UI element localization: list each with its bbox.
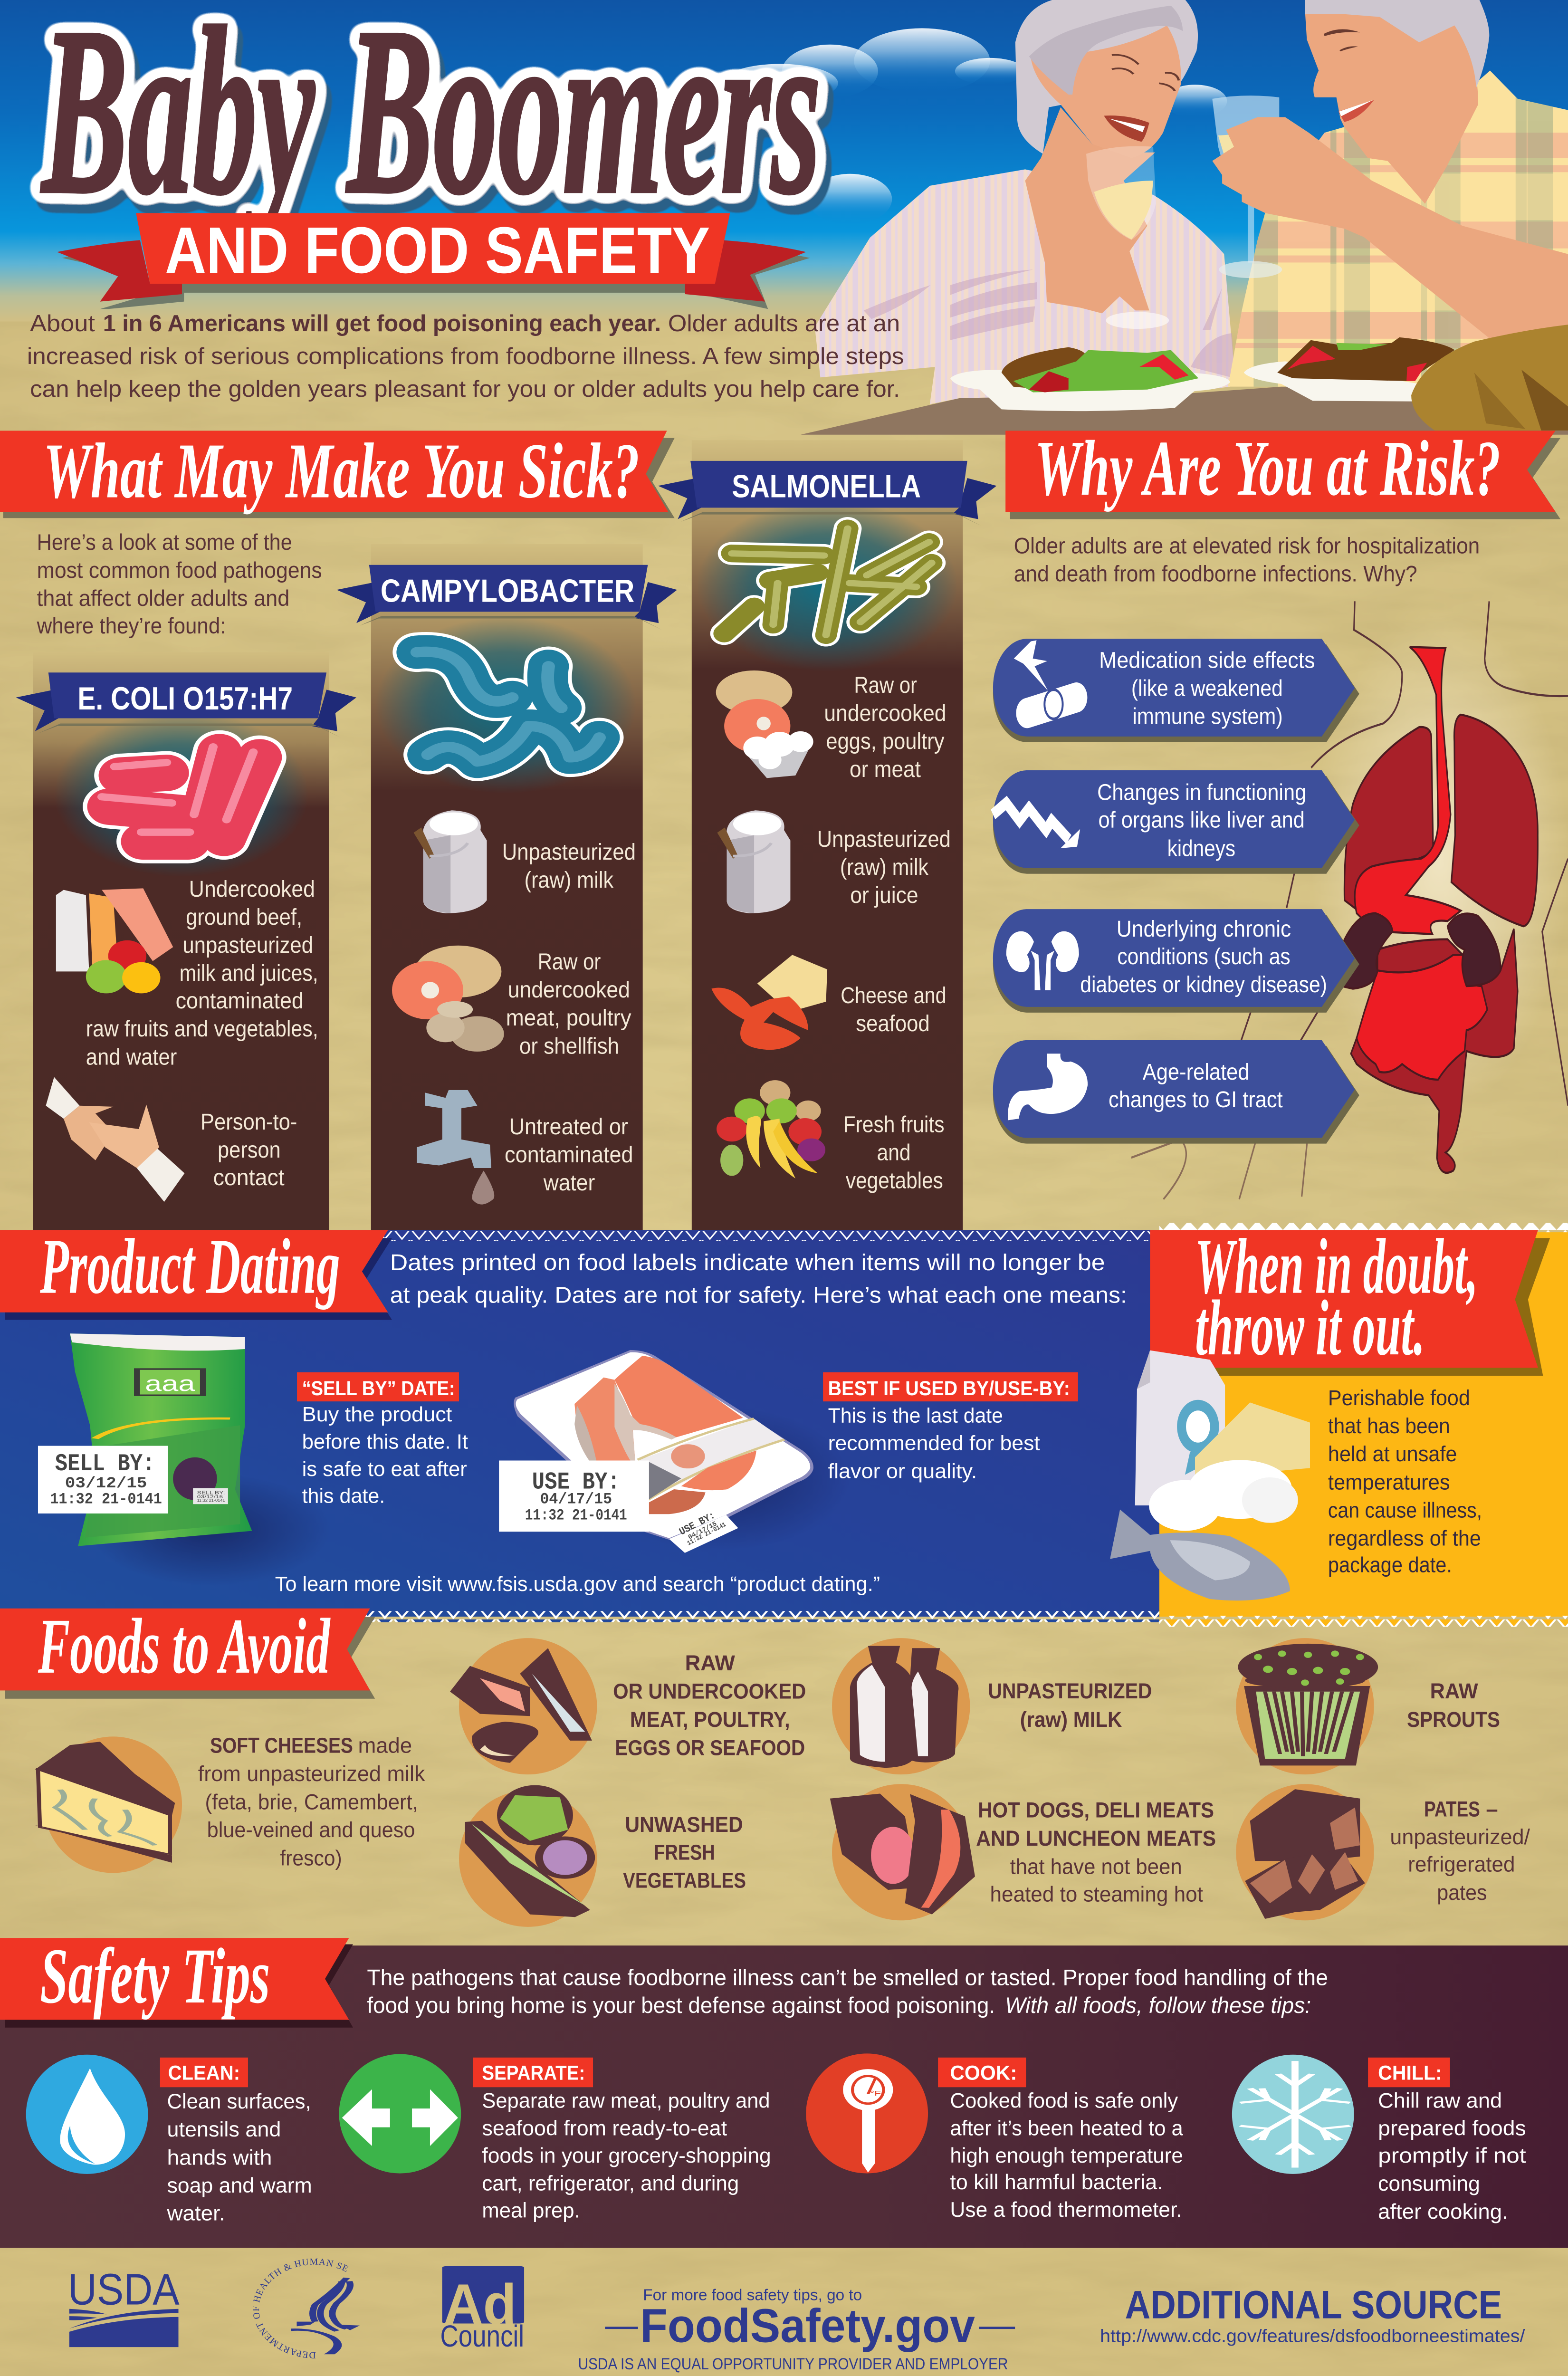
icon: carton, cheese, eggs and fish xyxy=(1110,1351,1310,1600)
icon: salad bag: aaa xyxy=(145,1372,195,1396)
panel: product dating: Buy the product xyxy=(302,1403,452,1426)
panel: product dating xyxy=(0,1230,1159,1622)
tip: clean: water. xyxy=(167,2201,225,2225)
tag: sell by xyxy=(38,1446,168,1514)
icon: milk can xyxy=(717,810,790,913)
text: person to person xyxy=(201,1109,297,1190)
ribbon: Campylobacter xyxy=(336,565,677,630)
icon: milk can xyxy=(414,810,487,913)
panel: foods to avoid: FRESH xyxy=(654,1840,715,1865)
icon: salad bag xyxy=(70,1333,252,1546)
ribbon: E. coli xyxy=(16,672,356,738)
text: unpasteurized milk xyxy=(502,839,636,893)
icon: E. coli bacteria xyxy=(102,747,259,842)
icon: soft cheese xyxy=(35,1736,182,1873)
icon: lightning and capsule xyxy=(1014,640,1076,719)
panel: foods to avoid: blue-veined and queso xyxy=(207,1818,415,1842)
text: E. coli sources: contaminated xyxy=(176,988,304,1014)
text: sell by description xyxy=(302,1403,468,1507)
tip: clean: CLEAN: xyxy=(168,2061,240,2084)
risk: medication: Medication side effects xyxy=(1099,647,1315,673)
text: eggs: or meat xyxy=(850,757,921,782)
text: water xyxy=(505,1114,633,1196)
banner: safety tips xyxy=(0,1932,353,2028)
icon: meat, fish and poultry xyxy=(450,1638,597,1774)
icon: vegetables xyxy=(459,1785,597,1927)
text: water: contaminated xyxy=(505,1142,633,1168)
right plate with meat xyxy=(1244,337,1454,402)
label: sell by date xyxy=(297,1372,459,1401)
text: fresh fruits: vegetables xyxy=(846,1168,943,1193)
label: best if used by xyxy=(823,1372,1078,1401)
tip: clean xyxy=(26,2055,312,2225)
ribbon: Salmonella xyxy=(658,461,996,526)
ribbon: Salmonella: SALMONELLA xyxy=(732,469,921,505)
icon: fruits and vegetables xyxy=(717,1080,825,1178)
risk: medication: immune system) xyxy=(1132,703,1283,729)
text: unpasteurized milk: Unpasteurized xyxy=(502,839,636,865)
panel: safety tips: cart, refrigerator, and during xyxy=(482,2171,739,2195)
man: smile and brows xyxy=(1324,29,1374,122)
tip: cook xyxy=(806,2053,1183,2222)
text: eggs: Raw or xyxy=(854,672,917,698)
icon: water drop xyxy=(26,2055,148,2174)
man: hair xyxy=(1305,0,1489,87)
text: person to person: Person-to- xyxy=(201,1109,297,1135)
text: meat poultry shellfish: or shellfish xyxy=(519,1033,619,1059)
icon: handshake xyxy=(46,1077,184,1202)
tip: chill xyxy=(1232,2055,1526,2223)
panel: safety tips: Clean surfaces, xyxy=(167,2089,311,2113)
title ribbon: and food safety xyxy=(57,213,810,309)
intro: pathogens: most common food pathogens xyxy=(37,558,322,583)
text: E. coli sources: ground beef, xyxy=(186,904,302,930)
infographic canvas: Older adults are at an xyxy=(668,310,900,336)
seal lettering: DEPARTMENT OF HEALTH & HUMAN SERVICES · USA xyxy=(0,0,350,2360)
icon: kidneys xyxy=(1006,931,1079,990)
icon: chicken, salmon and eggs xyxy=(716,671,813,778)
text: meat poultry shellfish: Raw or xyxy=(538,949,601,975)
infographic canvas: USE BY: xyxy=(532,1469,620,1496)
risk: chronic conditions: conditions (such as xyxy=(1117,944,1291,969)
text: hot dogs xyxy=(976,1798,1216,1906)
panel: product dating: before this date. It xyxy=(302,1430,468,1453)
illustration: older couple toasting at table xyxy=(801,0,1568,435)
icon: raw sprouts xyxy=(1236,1638,1378,1774)
icon: milk bottles xyxy=(832,1638,970,1774)
panel: product dating: flavor or quality. xyxy=(828,1460,977,1483)
infographic canvas: 11:32 21-0141 xyxy=(525,1506,627,1524)
icon: food thermometer xyxy=(806,2053,928,2174)
panel: product dating: is safe to eat after xyxy=(302,1457,467,1481)
risk: GI tract: changes to GI tract xyxy=(1109,1087,1283,1112)
text: why intro: and death from foodborne infections. Why? xyxy=(1014,561,1417,586)
tag: small rotated use by label: 04/17/15 xyxy=(687,1520,718,1542)
background: sky xyxy=(0,0,1568,321)
panel: safety tips: hands with xyxy=(167,2146,272,2169)
panel: foods to avoid: EGGS OR SEAFOOD xyxy=(615,1736,805,1760)
panel: product dating: SELL BY: xyxy=(55,1450,155,1477)
icon: cartons, meat and fruit xyxy=(56,888,173,993)
text: E. coli sources: unpasteurized xyxy=(182,932,313,958)
risk: organs: kidneys xyxy=(1167,835,1235,861)
man: face and neck xyxy=(1305,5,1478,204)
text: cheese and seafood xyxy=(841,983,947,1036)
panel: safety tips: seafood from ready-to-eat xyxy=(482,2116,727,2140)
text: pates: – xyxy=(1486,1797,1498,1821)
column: Salmonella xyxy=(658,440,996,1230)
panel: foods to avoid: OR UNDERCOOKED xyxy=(613,1679,806,1704)
woman: neck and arm xyxy=(1025,107,1155,313)
text: E. coli sources: Undercooked xyxy=(189,876,315,902)
panel: foods to avoid: UNWASHED xyxy=(625,1813,743,1837)
icon: salad bag: 11:32 21-0141 xyxy=(197,1498,225,1503)
text: soft cheeses xyxy=(198,1734,425,1870)
tip: separate: meal prep. xyxy=(482,2198,580,2222)
panel: product dating: 03/12/15 xyxy=(65,1475,147,1492)
text: eggs: undercooked xyxy=(824,700,947,726)
text: meat poultry shellfish: undercooked xyxy=(508,977,630,1003)
icon: snowflake xyxy=(1232,2055,1354,2174)
text: best if used description xyxy=(828,1404,1040,1483)
text: milk or juice: (raw) milk xyxy=(840,854,928,880)
risk: chronic conditions: Underlying chronic xyxy=(1117,916,1291,941)
column: Campylobacter xyxy=(336,544,677,1230)
blouse folds xyxy=(864,269,1235,378)
icon: chicken, salmon and clams xyxy=(392,946,504,1052)
panel: foods to avoid: (feta, brie, Camembert, xyxy=(205,1790,418,1814)
logo: FoodSafety.gov xyxy=(605,2299,1015,2352)
risk: GI tract xyxy=(993,1040,1359,1144)
text: unwashed vegetables xyxy=(623,1813,746,1892)
risk: organs: Changes in functioning xyxy=(1097,779,1306,805)
woman: blouse xyxy=(815,169,1234,404)
panel: foods to avoid: made xyxy=(358,1734,412,1757)
woman: champagne glass xyxy=(1086,146,1169,329)
panel: foods to avoid: SOFT CHEESES xyxy=(210,1734,353,1757)
intro: pathogens: that affect older adults and xyxy=(37,586,289,611)
ribbon: E. coli: E. COLI O157:H7 xyxy=(77,680,293,717)
table xyxy=(801,387,1568,435)
banner: what may make you sick: What May Make You Sick? xyxy=(43,427,640,515)
man: champagne glass xyxy=(1212,96,1282,278)
text: E. coli sources: and water xyxy=(86,1044,177,1070)
text: fresh fruits xyxy=(843,1112,945,1193)
tag: use by xyxy=(499,1460,649,1532)
tag: small rotated use by label xyxy=(677,1510,727,1547)
tag: small rotated use by label: USE BY: xyxy=(677,1510,717,1538)
panel: product dating: 11:32 21-0141 xyxy=(50,1491,162,1508)
man: arm and hand xyxy=(1212,117,1568,339)
risk: chronic conditions xyxy=(993,909,1359,1013)
banner: foods to avoid xyxy=(0,1602,375,1699)
risk: organs xyxy=(993,770,1359,874)
tip: separate xyxy=(339,2054,771,2222)
icon: Campylobacter bacteria xyxy=(417,652,600,761)
ribbon: Campylobacter: CAMPYLOBACTER xyxy=(381,573,634,609)
organs: lungs, stomach, kidneys, intestines xyxy=(1341,647,1538,1173)
text: E. coli sources: raw fruits and vegetables, xyxy=(86,1016,318,1042)
text: water: Untreated or xyxy=(509,1114,628,1140)
footer sources: For more food safety tips, go to xyxy=(643,2286,862,2304)
shadow blobs xyxy=(90,1474,330,1586)
text: E. coli sources: milk and juices, xyxy=(180,960,318,986)
text: milk or juice: Unpasteurized xyxy=(817,826,951,852)
footer logos: USDA xyxy=(68,2265,180,2314)
text: eggs xyxy=(824,672,947,782)
panel: foods to avoid: (raw) MILK xyxy=(1020,1707,1122,1732)
logo: health and human services seal xyxy=(291,2278,360,2354)
text: raw meat: RAW xyxy=(685,1651,735,1675)
intro text: dating xyxy=(390,1249,1127,1308)
text: unpasteurized milk: (raw) milk xyxy=(525,867,613,893)
panel: safety tips: soap and warm xyxy=(167,2174,312,2197)
text: meat poultry shellfish: meat, poultry xyxy=(506,1005,631,1031)
banner: product dating xyxy=(0,1222,392,1320)
risk: organs: of organs like liver and xyxy=(1098,807,1305,833)
icon: zigzag down arrow xyxy=(993,803,1080,848)
woman: front hair xyxy=(1029,6,1183,95)
tip: cook: COOK: xyxy=(950,2061,1017,2084)
icon: Salmonella bacteria xyxy=(724,528,932,635)
text: milk or juice: or juice xyxy=(850,882,918,908)
column: E. coli xyxy=(16,652,356,1230)
text: cheese and seafood: seafood xyxy=(856,1011,930,1036)
panel: why are you at risk xyxy=(993,425,1568,1199)
text: safety intro xyxy=(367,1965,1328,2018)
risk: medication xyxy=(993,639,1359,742)
icon: food thermometer: °F xyxy=(870,2089,881,2097)
icon: stomach xyxy=(1008,1054,1088,1120)
text: why intro xyxy=(1014,533,1480,586)
man: plaid shirt xyxy=(1206,68,1568,390)
intro: pathogens: Here’s a look at some of the xyxy=(37,530,292,555)
text: unpasteurized milk xyxy=(988,1679,1152,1732)
infographic canvas: Council xyxy=(440,2319,524,2353)
risk: chronic conditions: diabetes or kidney disease) xyxy=(1080,972,1327,997)
text: cheese and seafood: Cheese and xyxy=(841,983,947,1008)
clouds xyxy=(722,28,1227,224)
tip: separate: SEPARATE: xyxy=(482,2061,585,2084)
bread loaf xyxy=(1411,325,1568,431)
intro paragraph xyxy=(27,310,904,402)
footer logos xyxy=(68,2265,524,2354)
icon: hot dogs and deli meats xyxy=(830,1784,975,1920)
tag: small rotated use by label: 11:32 21-0141 xyxy=(686,1521,727,1547)
panel: foods to avoid xyxy=(0,1602,1530,1927)
red card xyxy=(1150,1222,1538,1371)
intro: pathogens xyxy=(37,530,322,639)
logo: USDA xyxy=(68,2265,180,2347)
panel: safety tips: utensils and xyxy=(167,2117,281,2141)
woman: hair xyxy=(1015,0,1198,154)
panel: safety tips: Separate raw meat, poultry and xyxy=(482,2089,770,2112)
panel: safety tips xyxy=(0,1932,1568,2248)
intro: pathogens: where they’re found: xyxy=(37,613,226,639)
text: when in doubt xyxy=(1328,1386,1482,1577)
icon: salad bag: SELL BY: xyxy=(197,1490,225,1495)
panel: what may make you sick xyxy=(0,427,996,1230)
infographic canvas: This is the last date xyxy=(828,1404,1003,1427)
logo: Ad Council xyxy=(440,2266,524,2353)
woman: smile xyxy=(1104,55,1179,142)
text: why intro: Older adults are at elevated risk for hospitalization xyxy=(1014,533,1480,558)
banner: what may make you sick xyxy=(0,427,675,518)
icon: pate xyxy=(1236,1784,1374,1920)
panel: safety tips: foods in your grocery-shopping xyxy=(482,2144,771,2167)
body outline and cream torso xyxy=(1131,601,1568,1199)
banner: why are you at risk: Why Are You at Risk? xyxy=(1035,425,1501,512)
risk: medication: (like a weakened xyxy=(1131,675,1283,701)
risk: GI tract: Age-related xyxy=(1143,1059,1250,1084)
icon: meat tray xyxy=(514,1350,813,1553)
text: meat poultry shellfish xyxy=(506,949,631,1059)
text: person to person: person xyxy=(218,1137,281,1163)
text: pates xyxy=(1390,1797,1530,1905)
panel: foods to avoid: MEAT, POULTRY, xyxy=(630,1707,790,1732)
text: water: water xyxy=(543,1170,595,1196)
text: fresh fruits: and xyxy=(877,1140,911,1165)
text: raw sprouts xyxy=(1407,1679,1500,1732)
panel: foods to avoid: from unpasteurized milk xyxy=(198,1762,425,1786)
icon: opposing arrows xyxy=(339,2054,461,2174)
text: eggs: eggs, poultry xyxy=(826,728,945,754)
panel: foods to avoid: fresco) xyxy=(280,1846,342,1870)
panel: foods to avoid: VEGETABLES xyxy=(623,1868,746,1892)
intro paragraph: About xyxy=(30,310,95,336)
infographic canvas: 04/17/15 xyxy=(540,1491,612,1508)
panel: when in doubt xyxy=(1110,1222,1568,1627)
text: milk or juice xyxy=(817,826,951,908)
red card shadow xyxy=(1210,1238,1550,1376)
woman: face xyxy=(1031,25,1181,158)
text: raw meat xyxy=(613,1651,806,1760)
left plate with salad xyxy=(950,347,1230,411)
infographic canvas: Ad xyxy=(444,2273,516,2336)
icon: lobster and cheese xyxy=(711,955,827,1050)
text: person to person: contact xyxy=(213,1165,285,1190)
footer sources xyxy=(578,2282,1525,2373)
text: sell by description: this date. xyxy=(302,1485,385,1507)
panel: safety tips: Safety Tips xyxy=(40,1932,270,2020)
panel: product dating: “SELL BY” DATE: xyxy=(302,1377,455,1399)
text: fresh fruits: Fresh fruits xyxy=(843,1112,945,1137)
text: E. coli sources xyxy=(86,876,318,1070)
icon: faucet xyxy=(417,1090,494,1205)
icon: salad bag: 03/12/15 xyxy=(197,1495,223,1499)
